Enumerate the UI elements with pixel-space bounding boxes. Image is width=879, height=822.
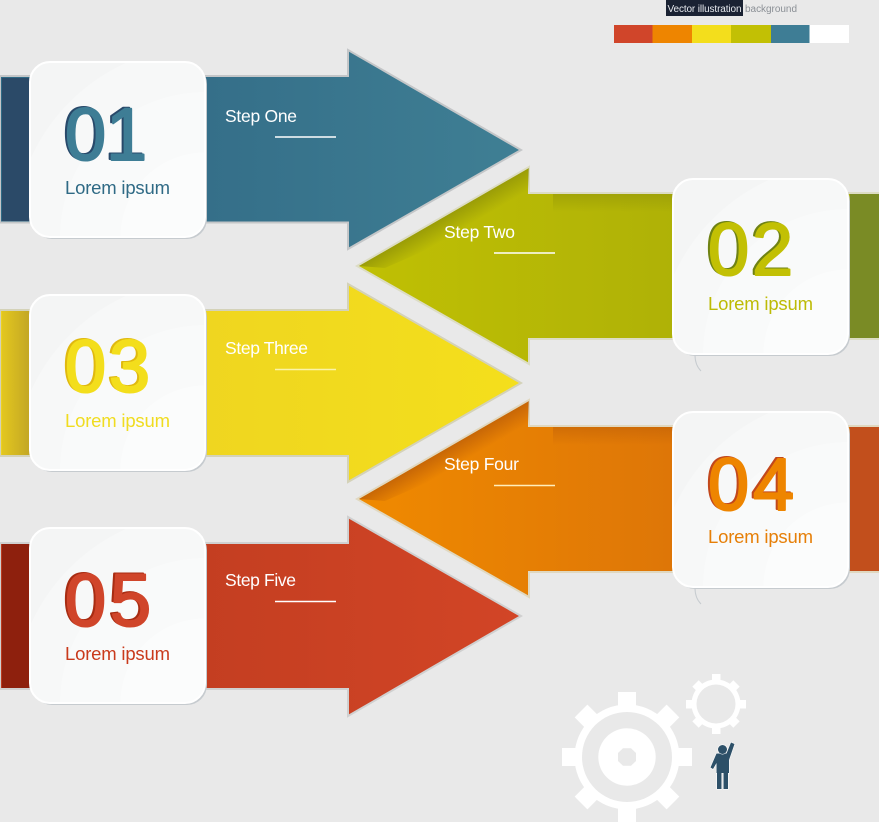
step four label: Step Four	[444, 454, 519, 474]
step three label: Step Three	[225, 338, 308, 358]
step underlines	[275, 137, 555, 602]
icon: small gear	[686, 674, 746, 734]
card 02: 02	[708, 208, 793, 291]
card 02: Lorem ipsum	[708, 293, 813, 314]
legend caption: Vector illustration	[668, 4, 742, 15]
step one label: Step One	[225, 106, 297, 126]
card 04: 04	[708, 443, 794, 526]
arrow: step five	[0, 517, 521, 716]
legend caption	[666, 0, 797, 16]
card 01: Lorem ipsum	[65, 177, 170, 198]
legend caption: background	[745, 4, 797, 15]
step five label: Step Five	[225, 570, 296, 590]
icon: large gear	[562, 692, 692, 822]
card 05	[30, 528, 207, 705]
card 01	[30, 62, 207, 239]
icon: person	[710, 742, 734, 789]
card 04	[673, 412, 850, 604]
card 04: Lorem ipsum	[708, 526, 813, 547]
arrow: step three	[0, 284, 521, 482]
card 01: 01	[65, 93, 147, 176]
card 02	[673, 179, 850, 371]
step two label: Step Two	[444, 222, 515, 242]
arrow: step one	[0, 50, 521, 249]
arrow: step two	[357, 167, 879, 364]
card 03	[30, 295, 207, 472]
colour swatches	[614, 25, 849, 43]
card 03: 03	[65, 325, 150, 408]
card 03: Lorem ipsum	[65, 410, 170, 431]
card 05: Lorem ipsum	[65, 643, 170, 664]
card 05: 05	[65, 559, 151, 642]
arrow: step four	[357, 400, 879, 597]
